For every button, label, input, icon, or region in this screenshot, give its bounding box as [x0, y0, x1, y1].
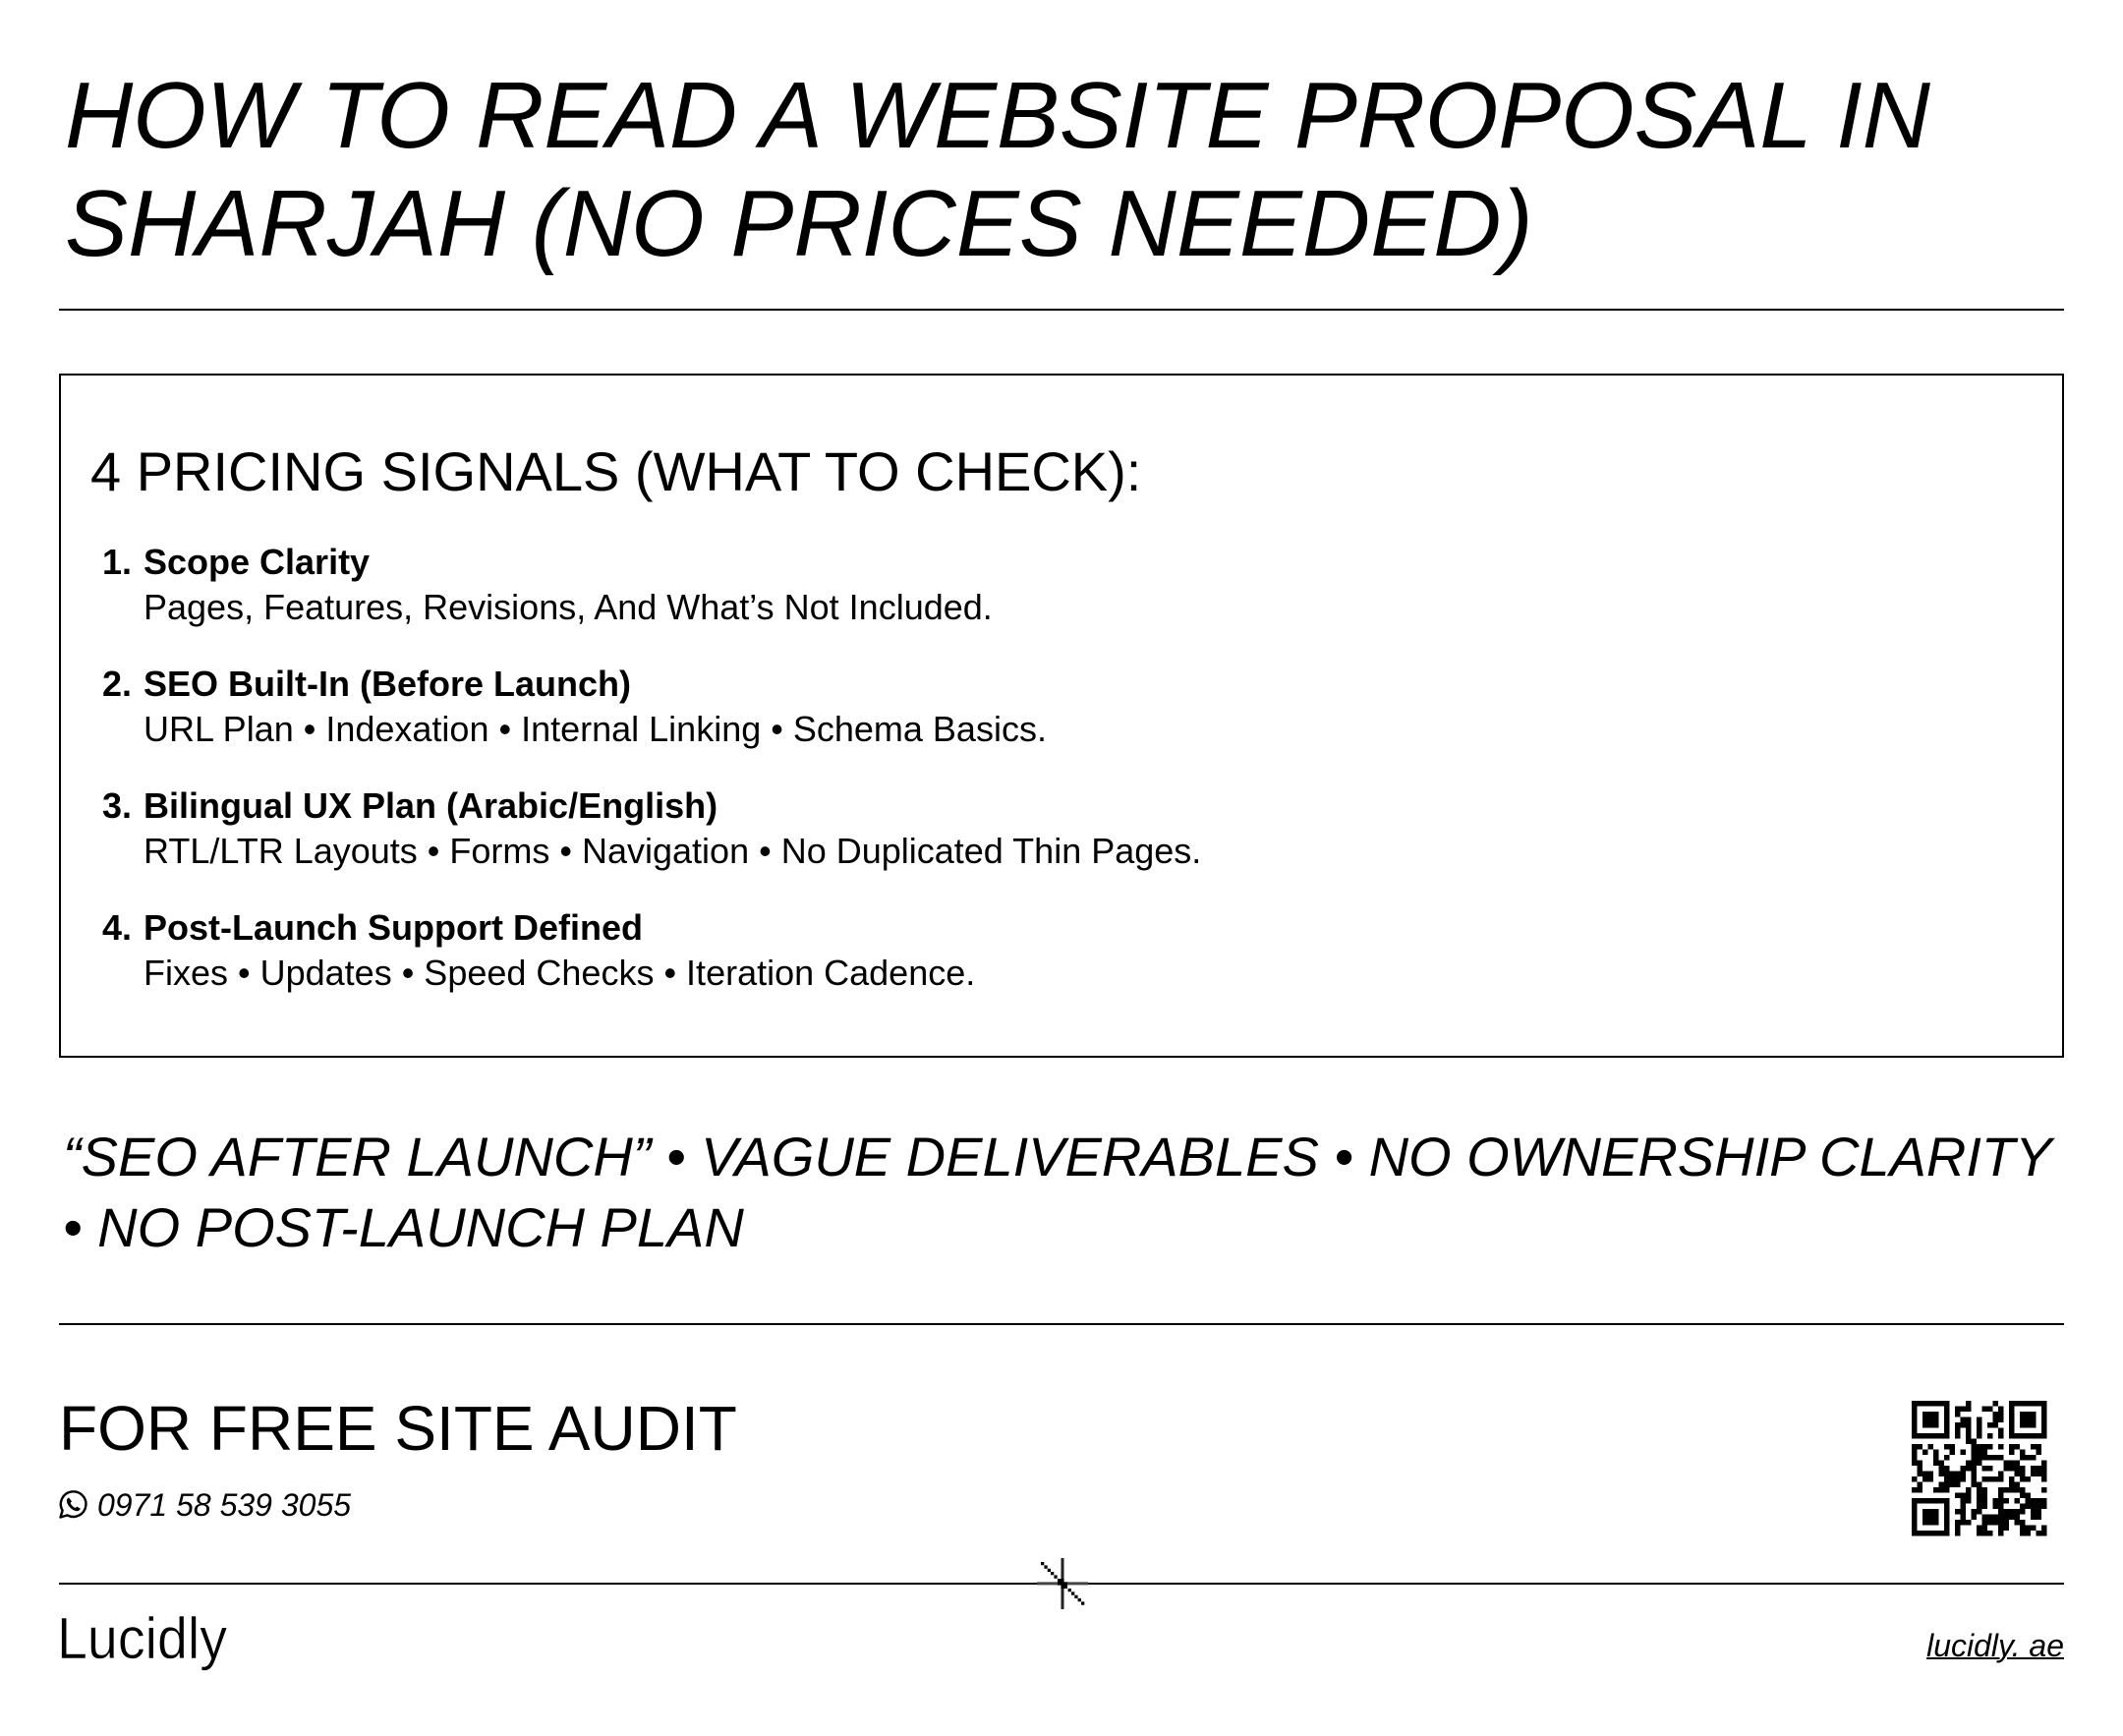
list item 2: seo built-in: 2.	[102, 664, 132, 704]
title	[65, 63, 1930, 276]
list item 2: seo built-in: URL Plan • Indexation • Internal Linking • Schema Basics.	[143, 709, 1047, 749]
list item 4: post-launch support: 4.	[102, 907, 132, 948]
title: SHARJAH (NO PRICES NEEDED)	[65, 171, 1533, 276]
list item 4: post-launch support: Post-Launch Support Defined	[143, 907, 643, 948]
list item 1: scope clarity: 1.	[102, 542, 132, 582]
call to action heading: FOR FREE SITE AUDIT	[59, 1393, 737, 1464]
icon: crosshair star	[1037, 1558, 1088, 1609]
red flags statement: “SEO AFTER LAUNCH” • VAGUE DELIVERABLES • NO OWNERSHIP CLARITY	[63, 1126, 2051, 1187]
website link: lucidly. ae	[1926, 1628, 2064, 1663]
qr code	[1912, 1401, 2046, 1535]
logo: lucidly: Lucidly	[57, 1606, 227, 1671]
list item 3: bilingual ux plan: RTL/LTR Layouts • Forms • Navigation • No Duplicated Thin Pages.	[143, 831, 1201, 871]
list item 1: scope clarity	[102, 542, 993, 627]
list item 4: post-launch support	[102, 907, 975, 993]
list item 4: post-launch support: Fixes • Updates • Speed Checks • Iteration Cadence.	[143, 953, 975, 993]
panel: pricing signals	[59, 374, 2064, 1058]
icon: whatsapp	[59, 1490, 87, 1519]
red flags statement: • NO POST-LAUNCH PLAN	[63, 1196, 744, 1258]
list item 2: seo built-in: SEO Built-In (Before Launch)	[143, 664, 631, 704]
list item 3: bilingual ux plan: 3.	[102, 785, 132, 826]
list item 3: bilingual ux plan	[102, 785, 1201, 871]
list item 3: bilingual ux plan: Bilingual UX Plan (Arabic/English)	[143, 785, 717, 826]
red flags statement	[63, 1126, 2055, 1258]
phone number: 0971 58 539 3055	[97, 1487, 351, 1523]
list item 2: seo built-in	[102, 664, 1047, 749]
list item 1: scope clarity: Scope Clarity	[143, 542, 370, 582]
title: HOW TO READ A WEBSITE PROPOSAL IN	[65, 63, 1930, 168]
list item 1: scope clarity: Pages, Features, Revisions, And What’s Not Included.	[143, 587, 993, 627]
panel heading: 4 PRICING SIGNALS (WHAT TO CHECK):	[90, 440, 1141, 502]
